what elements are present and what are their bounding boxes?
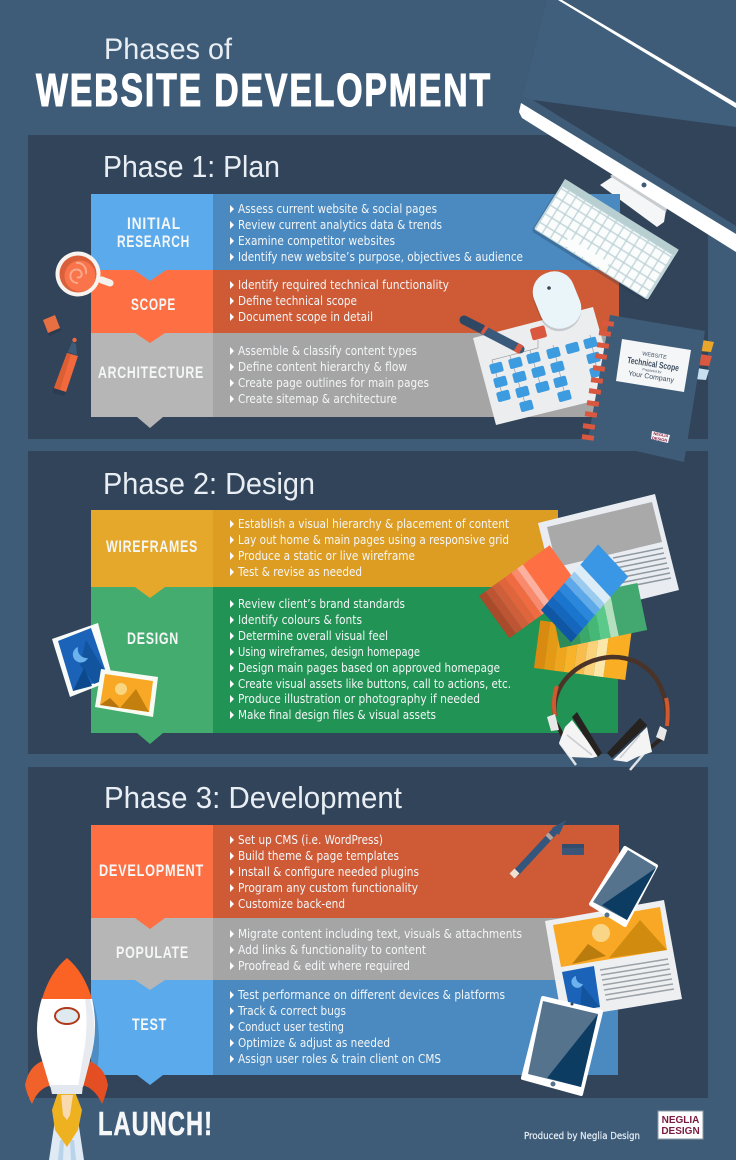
row: wireframes [91, 510, 558, 598]
row: initial research [91, 194, 620, 281]
title: WEBSITE DEVELOPMENT [36, 64, 492, 116]
row: scope: SCOPE [131, 295, 176, 314]
row: development: Program any custom functionality [238, 881, 418, 895]
icon: headphones [547, 657, 668, 770]
row: initial research: Examine competitor websites [238, 234, 395, 248]
icon: technical scope notebook: NEGLIA [653, 431, 669, 438]
icon: blue colour swatch [541, 544, 628, 642]
panel: phase 2 background [28, 451, 708, 754]
row: test: Test performance on different devices & platforms [237, 988, 505, 1002]
row: development: Customize back-end [238, 897, 345, 911]
sitemap sheet [473, 307, 618, 425]
row: wireframes: Lay out home & main pages using a responsive grid [238, 533, 509, 547]
row: architecture: Assemble & classify content types [238, 344, 417, 358]
phase 1 heading: Phase 1: Plan [103, 149, 280, 184]
row: wireframes: Establish a visual hierarchy & placement of content [238, 517, 509, 531]
icon: article sheet [545, 900, 682, 1020]
row: test: Optimize & adjust as needed [238, 1036, 390, 1050]
row: initial research: Identify new website’s purpose, objectives & audience [238, 250, 523, 264]
icon: yellow colour swatch [534, 620, 631, 680]
row: development: Set up CMS (i.e. WordPress) [238, 833, 383, 847]
icon: tablet [523, 998, 601, 1094]
row: architecture: Create sitemap & architecture [238, 392, 397, 406]
icon: eraser dark [562, 844, 584, 855]
icon: green colour swatch [550, 583, 647, 648]
icon: red colour swatch [479, 545, 580, 638]
icon: desktop monitor [519, 0, 736, 252]
icon: wireframe sheet [538, 494, 679, 619]
row: development [91, 825, 619, 929]
panel: phase 3 background [28, 767, 708, 1098]
row: populate: Migrate content including text, visuals & attachments [238, 927, 522, 941]
panel: phase 1 background [28, 135, 708, 439]
row: scope: Define technical scope [238, 294, 357, 308]
row: design: Determine overall visual feel [238, 629, 388, 643]
icon: orange photo [95, 669, 158, 717]
row: design: Design main pages based on approved homepage [238, 661, 500, 675]
row: wireframes: Produce a static or live wireframe [238, 549, 415, 563]
credit text: Produced by Neglia Design [524, 1131, 640, 1142]
row: test: Track & correct bugs [237, 1004, 346, 1018]
row: wireframes: Test & revise as needed [237, 565, 362, 579]
row: scope [91, 270, 619, 343]
icon: pen [512, 820, 566, 876]
icon: marker pen [464, 320, 521, 350]
row: architecture [91, 333, 619, 428]
row: test [91, 980, 618, 1085]
row: wireframes: WIREFRAMES [106, 537, 198, 556]
icon: highlighter [53, 338, 78, 396]
row: architecture: Create page outlines for main pages [238, 376, 429, 390]
row: design: Identify colours & fonts [238, 613, 362, 627]
row: populate: POPULATE [116, 943, 189, 962]
row: design [91, 587, 618, 744]
icon: technical scope notebook [582, 315, 714, 462]
row: initial research: RESEARCH [117, 232, 190, 251]
icon: smartphone [591, 848, 656, 925]
icon: technical scope notebook: Technical Scope [627, 355, 680, 373]
row: test: Assign user roles & train client on CMS [238, 1052, 441, 1066]
logo: neglia design: NEGLIA [662, 1115, 699, 1126]
row: development: Install & configure needed plugins [238, 865, 419, 879]
icon: blue photo [52, 623, 113, 697]
title [36, 33, 492, 116]
row: development: DEVELOPMENT [99, 861, 204, 880]
row: populate: Proofread & edit where required [238, 959, 410, 973]
logo: neglia design: DESIGN [661, 1126, 700, 1137]
title: Phases of [104, 33, 233, 66]
row: populate: Add links & functionality to content [238, 943, 426, 957]
row: populate [91, 918, 618, 990]
row: scope: Identify required technical functionality [238, 278, 449, 292]
icon: technical scope notebook: Your Company [628, 370, 675, 384]
row: design: Create visual assets like buttons, call to actions, etc. [238, 677, 511, 691]
row: design: Review client’s brand standards [238, 597, 405, 611]
row: initial research: INITIAL [127, 214, 181, 233]
row: development: Build theme & page templates [238, 849, 399, 863]
row: architecture: Define content hierarchy & flow [238, 360, 407, 374]
row: design: Produce illustration or photography if needed [238, 692, 480, 706]
icon: eraser [43, 315, 61, 336]
row: design: Make final design files & visual assets [238, 708, 436, 722]
icon: technical scope notebook: Prepared for [642, 367, 663, 375]
row: design: Using wireframes, design homepage [238, 645, 420, 659]
icon: mouse [526, 265, 587, 337]
icon: coffee cup [56, 252, 115, 296]
row: initial research: Review current analytics data & trends [238, 218, 442, 232]
logo: neglia design [658, 1111, 703, 1139]
icon: technical scope notebook: DESIGN [652, 435, 668, 443]
row: initial research: Assess current website & social pages [238, 202, 437, 216]
phase 3 heading: Phase 3: Development [104, 780, 402, 815]
launch text: LAUNCH! [98, 1105, 213, 1142]
row: architecture: ARCHITECTURE [98, 363, 204, 382]
icon: rocket [25, 958, 108, 1160]
row: design: DESIGN [127, 629, 179, 648]
row: test: Conduct user testing [238, 1020, 344, 1034]
row: scope: Document scope in detail [238, 310, 373, 324]
row: test: TEST [132, 1015, 167, 1034]
phase 2 heading: Phase 2: Design [103, 466, 315, 501]
icon: keyboard [531, 178, 680, 303]
icon: technical scope notebook: WEBSITE [642, 351, 667, 361]
